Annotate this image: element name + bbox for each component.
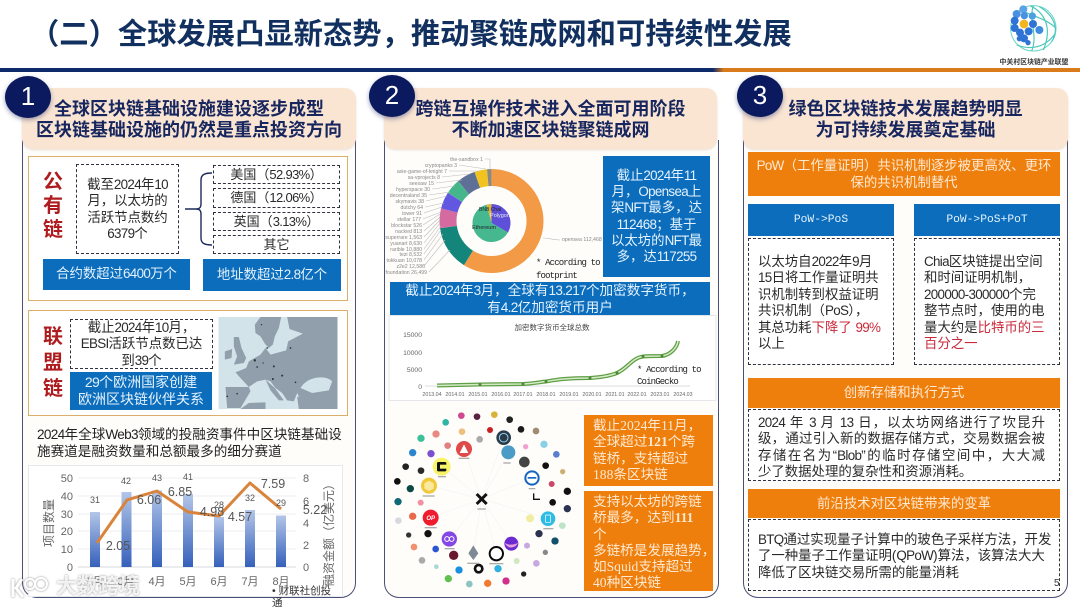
PoS+PoT text: 整节点时，使用的电 bbox=[924, 303, 1045, 318]
watermark bbox=[10, 574, 140, 599]
combo chart: projects and funding: 4月 bbox=[148, 576, 166, 588]
combo chart: projects and funding: 7.59 bbox=[261, 477, 285, 491]
EBSI callout: 到39个 bbox=[121, 353, 162, 368]
line chart: crypto total: 2013.04 bbox=[422, 392, 442, 398]
panel frame bbox=[384, 140, 719, 598]
donut chart: NFT marketplaces: * According to bbox=[536, 258, 600, 268]
Opensea stat bbox=[603, 156, 710, 277]
combo chart: projects and funding: 50 bbox=[61, 473, 73, 485]
combo chart: projects and funding: 20 bbox=[61, 526, 73, 538]
combo chart: projects and funding: 10 bbox=[61, 544, 73, 556]
network diagram: cross-chain bridges bbox=[394, 411, 571, 588]
country others: 其它 bbox=[263, 237, 290, 252]
contracts stat bbox=[43, 259, 190, 290]
combo chart: projects and funding: 2 bbox=[303, 540, 309, 552]
Opensea stat: 多，达117255 bbox=[617, 249, 696, 264]
frontier text: 降低了区块链交易所需的能量消耗 bbox=[758, 565, 959, 580]
EU partnership stat: 29个欧洲国家创建 bbox=[85, 374, 197, 390]
donut chart: NFT marketplaces: the-sandbox 1 bbox=[450, 157, 483, 163]
EBSI callout: EBSI活跃节点数已达 bbox=[81, 336, 202, 351]
combo chart: projects and funding: 6.85 bbox=[168, 485, 192, 499]
number badge 1 bbox=[5, 76, 51, 118]
donut chart: NFT marketplaces: superrare 1,563 bbox=[385, 235, 422, 241]
network diagram: cross-chain bridges: OP bbox=[426, 516, 436, 522]
storage heading: 创新存储和执行方式 bbox=[844, 385, 964, 400]
storage text: 存储在名为“Blob”的临时存储空间中，大大减 bbox=[758, 448, 1045, 463]
combo chart: projects and funding: 0 bbox=[67, 562, 73, 574]
combo chart: projects and funding: 28 bbox=[214, 500, 224, 510]
consensus banner: 保的共识机制替代 bbox=[850, 175, 958, 190]
line chart: crypto total: 2023.01 bbox=[650, 392, 670, 398]
Opensea stat: 截止2024年11 bbox=[617, 168, 696, 183]
combo chart: projects and funding: 31 bbox=[90, 495, 100, 505]
combo chart: projects and funding: 6月 bbox=[210, 576, 228, 588]
line chart: crypto total: 2020.01 bbox=[582, 392, 602, 398]
frontier text: BTQ通过实现量子计算中的玻色子采样方法，开发 bbox=[758, 532, 1051, 547]
country UK: 英国（3.13%） bbox=[234, 214, 319, 229]
number badge 1: 1 bbox=[21, 81, 35, 111]
heading: 全球区块链基础设施建设逐步成型 bbox=[54, 99, 324, 119]
ethereum bridges stat: 支持以太坊的跨链 bbox=[593, 494, 702, 509]
donut chart: NFT marketplaces: stellar 177 bbox=[397, 217, 421, 223]
panel: infrastructure bbox=[2, 75, 357, 608]
country USA bbox=[213, 165, 340, 184]
panel: green blockchain bbox=[734, 74, 1069, 598]
consensus banner: PoW（工作量证明）共识机制逐步被更高效、更环 bbox=[757, 158, 1051, 173]
combo chart: projects and funding: 6 bbox=[303, 496, 309, 508]
line chart: crypto total: 2022.01 bbox=[627, 392, 647, 398]
public chain label: 链 bbox=[43, 219, 63, 241]
combo chart: projects and funding: 2.05 bbox=[106, 539, 130, 553]
donut chart: NFT marketplaces bbox=[385, 157, 602, 280]
consortium chain label: 盟 bbox=[43, 352, 63, 374]
ethereum bridges stat: 40种区块链 bbox=[593, 575, 661, 590]
investment summary text: 施赛道是融资数量和总额最多的细分赛道 bbox=[37, 444, 282, 459]
ethereum nodes callout: 6379个 bbox=[107, 226, 148, 241]
number badge 2: 2 bbox=[385, 80, 399, 110]
heading: 跨链互操作技术进入全面可用阶段 bbox=[416, 99, 686, 119]
combo chart: projects and funding: 4.98 bbox=[200, 505, 224, 519]
PoS text: 其总功耗下降了 99% bbox=[758, 320, 880, 335]
PoS+PoT heading: PoW->PoS+PoT bbox=[946, 214, 1028, 226]
panel: cross-chain bbox=[366, 74, 719, 598]
donut chart: NFT marketplaces: Ethereum bbox=[472, 225, 496, 231]
line chart: crypto total: 2021.01 bbox=[605, 392, 625, 398]
line chart: crypto total bbox=[388, 315, 716, 401]
combo chart: projects and funding: • 财联社创投 bbox=[272, 584, 332, 597]
watermark: 大数跨境 bbox=[56, 575, 140, 598]
contracts stat: 合约数超过6400万个 bbox=[56, 266, 177, 281]
donut chart: NFT marketplaces: tower 91 bbox=[402, 211, 422, 217]
line chart: crypto total: 加密数字货币全球总数 bbox=[514, 322, 590, 332]
public chain label bbox=[43, 171, 63, 241]
PoS text: 共识机制（PoS）， bbox=[758, 303, 868, 318]
ethereum bridges stat: 个 bbox=[593, 527, 607, 542]
crypto users stat bbox=[390, 282, 710, 315]
donut chart: NFT marketplaces: rarible 10,880 bbox=[390, 247, 422, 253]
addresses stat: 地址数超过2.8亿个 bbox=[217, 267, 327, 282]
line chart: crypto total: 2017.01 bbox=[513, 392, 533, 398]
EU partnership stat bbox=[70, 372, 212, 410]
heading bbox=[743, 88, 1068, 149]
heading bbox=[22, 88, 356, 149]
PoS+PoT text: 量大约是比特币的三 bbox=[924, 320, 1045, 335]
PoS text: 以太坊自2022年9月 bbox=[758, 254, 872, 269]
donut chart: NFT marketplaces: axie-game-of-knight 7 bbox=[397, 169, 447, 175]
donut chart: NFT marketplaces: decentraland 35 bbox=[390, 193, 427, 199]
ethereum bridges stat: 桥最多，达到111 bbox=[593, 510, 693, 525]
line chart: crypto total: 2024.03 bbox=[673, 392, 693, 398]
crypto users stat: 有4.2亿加密货币用户 bbox=[487, 300, 613, 315]
country Germany bbox=[213, 188, 340, 208]
logo caption: 中关村区块链产业联盟 bbox=[1000, 59, 1068, 66]
Opensea stat: 月，Opensea上 bbox=[612, 184, 701, 199]
bridges stat: 截止2024年11月， bbox=[593, 418, 701, 433]
crypto users stat: 截止2024年3月，全球有13.217个加密数字货币， bbox=[405, 283, 695, 298]
line chart: crypto total: 2019.01 bbox=[559, 392, 579, 398]
PoS text: 识机制转到权益证明 bbox=[758, 287, 879, 302]
addresses stat bbox=[203, 259, 341, 291]
donut chart: NFT marketplaces: tezi 8,532 bbox=[400, 252, 422, 258]
storage text: 少了数据处理的复杂性和资源消耗。 bbox=[758, 464, 972, 479]
page number: 5 bbox=[1054, 578, 1060, 589]
combo chart: projects and funding: 43 bbox=[152, 473, 162, 483]
bridges stat: 链桥，支持超过 bbox=[593, 451, 688, 466]
combo chart: projects and funding: 4 bbox=[303, 518, 309, 530]
storage heading bbox=[748, 378, 1060, 408]
donut chart: NFT marketplaces: Polygon bbox=[490, 213, 510, 219]
PoS text: 15日将工作量证明共 bbox=[758, 270, 879, 285]
title: （二）全球发展凸显新态势，推动聚链成网和可持续性发展 bbox=[30, 18, 792, 51]
number badge 3 bbox=[737, 75, 783, 117]
line chart: crypto total: CoinGecko bbox=[637, 377, 678, 387]
donut chart: NFT marketplaces: z2e2 12,586 bbox=[396, 264, 425, 270]
PoS+PoT text: 200000-300000个完 bbox=[924, 287, 1036, 302]
EBSI callout bbox=[70, 319, 213, 369]
combo chart: projects and funding: 42 bbox=[121, 476, 131, 486]
ethereum bridges stat bbox=[584, 491, 713, 591]
combo chart: projects and funding: 4.57 bbox=[228, 510, 252, 524]
frontier heading: 前沿技术对区块链带来的变革 bbox=[817, 496, 991, 511]
bridges stat: 全球超过121个跨 bbox=[593, 434, 695, 449]
combo chart: projects and funding: 0 bbox=[303, 562, 309, 574]
consortium chain label: 联 bbox=[43, 326, 63, 348]
donut chart: NFT marketplaces: blockstar 526 bbox=[391, 223, 422, 229]
PoS heading bbox=[748, 204, 894, 236]
donut chart: NFT marketplaces: skymavis 38 bbox=[395, 199, 424, 205]
combo chart: projects and funding: 5.22 bbox=[303, 503, 327, 517]
PoS+PoT text: 百分之一 bbox=[924, 336, 978, 351]
Opensea stat: 以太坊的NFT最 bbox=[611, 233, 702, 248]
storage text bbox=[748, 409, 1060, 481]
combo chart: projects and funding: 32 bbox=[245, 493, 255, 503]
PoS text: 以上 bbox=[758, 336, 785, 351]
storage text: 2024 年 3 月 13 日，以太坊网络进行了坎昆升 bbox=[758, 415, 1045, 430]
ethereum nodes callout: 截至2024年10 bbox=[87, 177, 168, 192]
number badge 3: 3 bbox=[753, 80, 767, 110]
ethereum nodes callout bbox=[76, 164, 179, 254]
heading bbox=[384, 88, 717, 149]
public chain box bbox=[28, 156, 348, 301]
combo chart: projects and funding: 40 bbox=[61, 491, 73, 503]
donut chart: NFT marketplaces: cryptopanks 3 bbox=[425, 163, 457, 169]
heading: 区块链基础设施的仍然是重点投资方向 bbox=[36, 120, 342, 140]
number badge 2 bbox=[369, 75, 415, 117]
header rule bbox=[0, 68, 1080, 72]
PoS heading: PoW->PoS bbox=[794, 214, 848, 226]
consensus banner bbox=[748, 152, 1060, 196]
donut chart: NFT marketplaces: BNB Chai bbox=[479, 207, 501, 213]
line chart: crypto total: 0 bbox=[418, 384, 422, 391]
line chart: crypto total: 2014.01 bbox=[445, 392, 465, 398]
public chain label: 有 bbox=[43, 195, 63, 217]
frontier heading bbox=[748, 489, 1060, 518]
ethereum bridges stat: 如Squid支持超过 bbox=[593, 559, 693, 574]
panel frame bbox=[22, 140, 356, 598]
combo chart: projects and funding: 2月 bbox=[86, 576, 104, 588]
donut chart: NFT marketplaces: tokkuan 10,078 bbox=[387, 258, 422, 264]
map of Europe bbox=[218, 317, 338, 409]
storage text: 级，通过引入新的数据存储方式，交易数据会被 bbox=[758, 431, 1045, 446]
PoS+PoT heading bbox=[914, 204, 1060, 236]
frontier text bbox=[748, 519, 1060, 591]
combo chart: projects and funding: 6.06 bbox=[137, 493, 161, 507]
line chart: crypto total: * According to bbox=[637, 365, 701, 375]
Opensea stat: 112468；基于 bbox=[617, 217, 696, 232]
frontier text: 了一种量子工作量证明(QPoW)算法，该算法大大 bbox=[758, 548, 1045, 563]
heading: 不断加速区块链聚链成网 bbox=[452, 120, 650, 140]
ethereum bridges stat: 多链桥是发展趋势， bbox=[593, 543, 715, 558]
country others bbox=[213, 235, 340, 254]
line chart: crypto total: 2015.01 bbox=[468, 392, 488, 398]
combo chart: projects and funding: 8 bbox=[303, 473, 309, 485]
public chain label: 公 bbox=[43, 171, 63, 193]
ethereum nodes callout: 活跃节点数约 bbox=[87, 210, 168, 225]
line chart: crypto total: 2016.01 bbox=[491, 392, 511, 398]
panel frame bbox=[743, 140, 1068, 598]
PoS+PoT text: Chia区块链提出空间 bbox=[924, 254, 1043, 269]
PoS text bbox=[748, 238, 894, 365]
donut chart: NFT marketplaces: hyperspace 30 bbox=[396, 187, 430, 193]
EBSI callout: 截止2024年10月， bbox=[88, 320, 195, 335]
combo chart: projects and funding: 5月 bbox=[179, 576, 197, 588]
PoS+PoT text bbox=[914, 238, 1060, 365]
donut chart: NFT marketplaces: seesaw 15 bbox=[409, 181, 434, 187]
consortium chain label bbox=[43, 326, 63, 400]
combo chart: projects and funding: 8月 bbox=[272, 576, 290, 588]
combo chart: projects and funding bbox=[28, 465, 343, 608]
donut chart: NFT marketplaces: nacked 813 bbox=[395, 229, 422, 235]
ethereum nodes callout: 月，以太坊的 bbox=[87, 193, 168, 208]
combo chart: projects and funding: 7月 bbox=[241, 576, 259, 588]
combo chart: projects and funding: 29 bbox=[276, 498, 286, 508]
combo chart: projects and funding: 项目数量 bbox=[41, 499, 56, 547]
country Germany: 德国（12.06%） bbox=[230, 190, 323, 205]
consortium chain label: 链 bbox=[43, 378, 63, 400]
bracket bbox=[185, 172, 212, 246]
country UK bbox=[213, 212, 340, 231]
line chart: crypto total: 2018.01 bbox=[536, 392, 556, 398]
combo chart: projects and funding: 41 bbox=[183, 472, 193, 482]
donut chart: NFT marketplaces: dutchy 64 bbox=[400, 205, 423, 211]
combo chart: projects and funding: 3月 bbox=[117, 576, 135, 588]
donut chart: NFT marketplaces: yuanart 8,630 bbox=[390, 241, 422, 247]
donut chart: NFT marketplaces: foundation 26,499 bbox=[385, 270, 427, 276]
heading: 绿色区块链技术发展趋势明显 bbox=[788, 99, 1022, 119]
line chart: crypto total: 5000 bbox=[407, 367, 422, 374]
combo chart: projects and funding: 30 bbox=[61, 509, 73, 521]
line chart: crypto total: 15000 bbox=[403, 332, 422, 339]
combo chart: projects and funding: 融资金额（亿美元） bbox=[321, 478, 336, 586]
investment summary text: 2024年全球Web3领域的投融资事件中区块链基础设 bbox=[37, 427, 342, 442]
icon: alliance logo bbox=[1010, 5, 1056, 52]
EU partnership stat: 欧洲区块链伙伴关系 bbox=[78, 391, 204, 407]
investment summary text bbox=[37, 427, 342, 459]
donut chart: NFT marketplaces: sa-vprojects 8 bbox=[408, 175, 440, 181]
line chart: crypto total: 10000 bbox=[403, 350, 422, 357]
country USA: 美国（52.93%） bbox=[230, 167, 323, 182]
bridges stat: 188条区块链 bbox=[593, 467, 668, 482]
consortium chain box bbox=[28, 310, 348, 416]
donut chart: NFT marketplaces: opensea 112,468 bbox=[562, 237, 602, 243]
PoS+PoT text: 和时间证明机制， bbox=[924, 270, 1031, 285]
Opensea stat: 架NFT最多，达 bbox=[611, 200, 702, 215]
bridges stat bbox=[584, 415, 713, 486]
heading: 为可持续发展奠定基础 bbox=[816, 120, 996, 140]
